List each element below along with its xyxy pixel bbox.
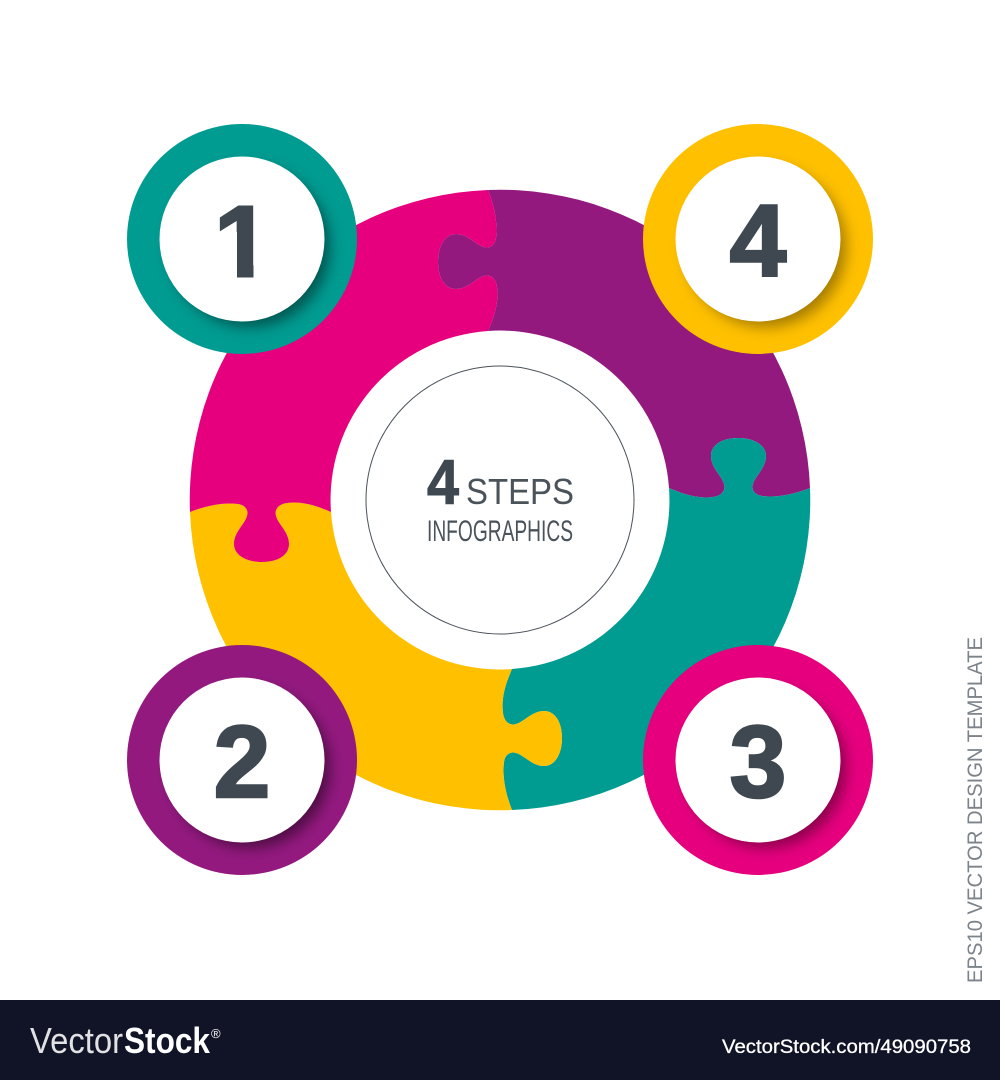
title: 4 steps bbox=[427, 448, 574, 518]
footer logo bbox=[30, 1020, 221, 1061]
footer url: VectorStock.com/49090758 bbox=[722, 1037, 971, 1058]
step 2 badge bbox=[127, 645, 357, 875]
side caption: EPS10 VECTOR DESIGN TEMPLATE bbox=[964, 637, 987, 983]
title: 4 steps: STEPS bbox=[466, 471, 574, 512]
step 4 badge bbox=[643, 124, 873, 354]
number 4: 4 bbox=[730, 184, 787, 298]
puzzle piece: teal bbox=[503, 438, 810, 810]
footer bar bbox=[0, 1000, 1000, 1080]
title: 4 steps: 4 bbox=[427, 448, 459, 518]
step 1 badge bbox=[127, 124, 357, 354]
footer logo: Vector bbox=[30, 1020, 123, 1061]
puzzle piece: purple bbox=[438, 190, 810, 497]
subtitle: infographics: INFOGRAPHICS bbox=[427, 515, 573, 548]
center circle with title bbox=[331, 331, 669, 669]
footer logo: ® bbox=[211, 1026, 221, 1041]
puzzle piece: pink bbox=[190, 190, 497, 562]
number 2: 2 bbox=[214, 705, 270, 819]
number 3: 3 bbox=[730, 705, 786, 819]
footer logo: Stock bbox=[124, 1020, 211, 1061]
puzzle ring bbox=[190, 190, 810, 810]
number 1: 1 bbox=[214, 185, 271, 299]
puzzle piece: yellow bbox=[190, 503, 562, 810]
step 3 badge bbox=[643, 645, 873, 875]
